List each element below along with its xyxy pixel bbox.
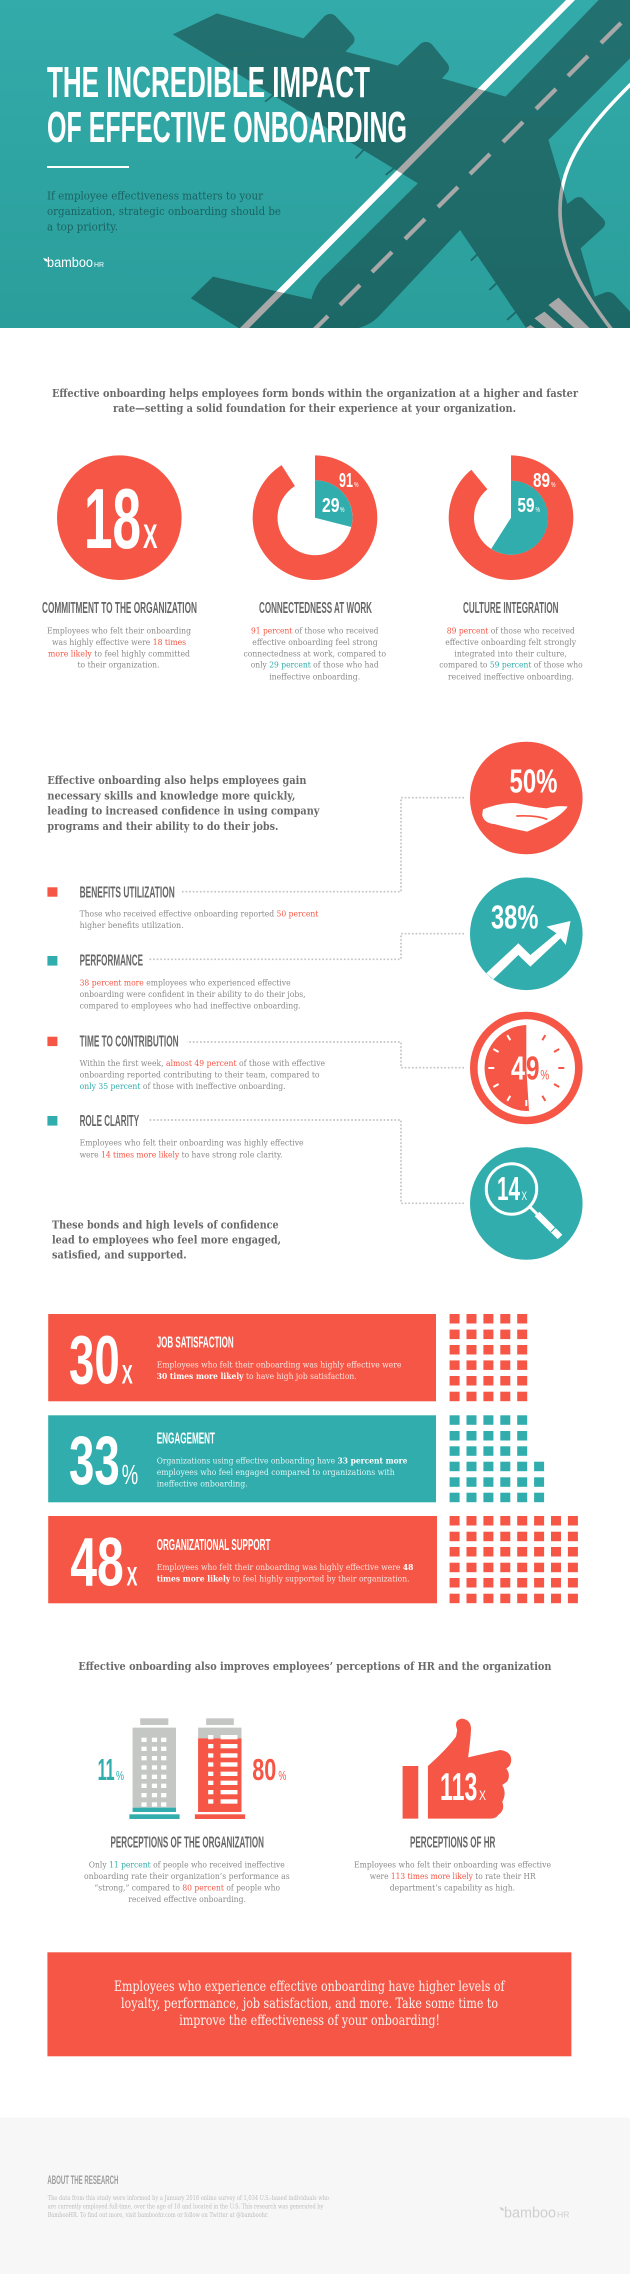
card: engagement: %	[122, 1459, 138, 1490]
subtitle	[47, 190, 281, 234]
chart: culture donut: %	[551, 482, 556, 489]
text block: commitment: COMMITMENT TO THE ORGANIZATION	[42, 600, 197, 617]
icon: 38% growth arrow	[470, 878, 583, 990]
list item: time to contribution	[47, 1034, 325, 1092]
card: job satisfaction: 30 times more likely to have high job satisfaction.	[157, 1372, 357, 1382]
chart: culture donut	[449, 455, 573, 580]
text block: culture: 89 percent of those who received	[447, 626, 575, 636]
icon: 50% hand: 50%	[510, 763, 558, 800]
list item: role clarity: ROLE CLARITY	[80, 1113, 139, 1130]
stat: commitment 18x	[57, 455, 182, 580]
chart: connectedness donut: 29	[322, 495, 340, 517]
panel: bonds section	[42, 386, 583, 682]
text block: perceptions of HR	[354, 1834, 551, 1894]
card: engagement: Organizations using effective onboarding have 33 percent more	[157, 1456, 408, 1466]
chart: connectedness donut: 91	[339, 470, 353, 492]
stat: commitment 18x: X	[143, 518, 158, 556]
subtitle: a top priority.	[47, 220, 118, 234]
logo: bambooHR footer: HR	[557, 2209, 570, 2219]
callout: conclusion: Employees who experience effective onboarding have higher levels of	[114, 1979, 506, 1995]
list item: benefits utilization: higher benefits utilization.	[80, 921, 184, 931]
text block: commitment	[42, 600, 197, 671]
text block: culture: compared to 59 percent of those who	[439, 661, 583, 671]
card: job satisfaction: JOB SATISFACTION	[157, 1335, 234, 1352]
logo: bambooHR: HR	[94, 260, 105, 269]
card: organizational support: X	[127, 1562, 137, 1592]
text block: commitment: was highly effective were 18 times	[52, 638, 186, 648]
card: organizational support	[48, 1516, 437, 1603]
icon: grey building 11%	[98, 1718, 180, 1819]
list item: time to contribution: TIME TO CONTRIBUTION	[80, 1034, 179, 1051]
text block: perceptions of the organization: “strong,” compared to 80 percent of people who	[94, 1883, 280, 1894]
chart: connectedness donut: %	[354, 482, 358, 489]
card: job satisfaction: 30	[69, 1321, 120, 1398]
pictogram: job satisfaction squares	[450, 1314, 527, 1401]
text block: research note	[48, 2195, 329, 2219]
icon: 49% clock: %	[540, 1067, 549, 1082]
icon: red building 80%	[195, 1718, 287, 1819]
text block: perceptions of HR: Employees who felt their onboarding was effective	[354, 1860, 551, 1870]
list item: performance	[47, 953, 306, 1011]
icon: 14x magnifier: X	[522, 1189, 527, 1203]
icon: red building 80%: 80	[252, 1752, 276, 1787]
title: THE INCREDIBLE IMPACT	[47, 58, 370, 107]
list item: performance: PERFORMANCE	[80, 953, 143, 970]
card: organizational support: ORGANIZATIONAL SUPPORT	[157, 1537, 271, 1554]
callout: conclusion: improve the effectiveness of your onboarding!	[179, 2013, 440, 2029]
icon: 14x magnifier	[470, 1147, 583, 1260]
subtitle: organization, strategic onboarding should be	[47, 205, 281, 218]
icon: 14x magnifier: 14	[497, 1170, 520, 1207]
text block: culture: received ineffective onboarding.	[448, 672, 574, 682]
text block: connectedness: only 29 percent of those who had	[251, 661, 379, 671]
heading: skills intro	[47, 773, 320, 833]
card: organizational support: 48	[70, 1524, 124, 1601]
text block: culture: effective onboarding felt strongly	[445, 638, 576, 648]
icon: 49% clock: 4	[511, 1049, 525, 1086]
chart: connectedness donut	[253, 455, 377, 580]
card: engagement	[48, 1415, 436, 1502]
panel: skills section	[47, 742, 583, 1262]
callout: conclusion	[47, 1952, 571, 2056]
icon: thumbs up 113x: 113	[440, 1766, 477, 1809]
list item: benefits utilization	[47, 884, 319, 931]
chart: culture donut: 89	[533, 470, 550, 492]
list item: benefits utilization: BENEFITS UTILIZATION	[80, 884, 175, 902]
icon: grey building 11%: %	[116, 1768, 124, 1783]
list item: time to contribution: Within the first week, almost 49 percent of those with effective	[80, 1059, 325, 1069]
text block: culture: integrated into their culture,	[454, 649, 567, 659]
list item: role clarity	[47, 1113, 304, 1160]
chart: connectedness donut: %	[340, 507, 344, 514]
text block: perceptions of the organization: PERCEPTIONS OF THE ORGANIZATION	[110, 1834, 264, 1851]
icon: 49% clock	[470, 1012, 583, 1124]
heading: skills intro: necessary skills and knowledge more quickly,	[47, 788, 295, 802]
chart: culture donut: 59	[518, 495, 534, 517]
text block: connectedness: CONNECTEDNESS AT WORK	[259, 600, 372, 617]
text block: connectedness: effective onboarding feel strong	[252, 638, 378, 648]
text block: commitment: more likely to feel highly committed	[48, 649, 190, 659]
heading: skills intro: programs and their ability to do their jobs.	[47, 819, 278, 833]
text block: connectedness: connectedness at work, compared to	[244, 649, 386, 659]
card: organizational support: times more likely to feel highly supported by their organization.	[157, 1575, 410, 1585]
stat: commitment 18x: 18	[84, 472, 141, 567]
card: engagement: ineffective onboarding.	[157, 1479, 248, 1489]
card: engagement: ENGAGEMENT	[157, 1430, 215, 1447]
text block: perceptions of the organization: received effective onboarding.	[128, 1895, 246, 1905]
icon: thumbs up 113x	[403, 1719, 511, 1819]
text block: commitment: to their organization.	[78, 661, 160, 671]
list item: benefits utilization: Those who received effective onboarding reported 50 percent	[80, 910, 319, 920]
callout: conclusion: loyalty, performance, job satisfaction, and more. Take some time to	[121, 1996, 498, 2012]
card: engagement: employees who feel engaged compared to organizations with	[157, 1468, 395, 1478]
heading: bonds and confidence	[52, 1217, 281, 1262]
panel: outcomes bars	[48, 1314, 578, 1603]
text block: research note: The data from this study were informed by a January 2018 online survey of 1,034 U.S.-based individuals who	[48, 2195, 329, 2202]
text block: connectedness: 91 percent of those who received	[251, 626, 379, 636]
icon: grey building 11%: 11	[98, 1752, 115, 1787]
list item: role clarity: were 14 times more likely to have strong role clarity.	[80, 1150, 283, 1160]
icon: 49% clock: 9	[526, 1049, 540, 1086]
heading: bonds and confidence: lead to employees who feel more engaged,	[52, 1233, 281, 1247]
list item: performance: 38 percent more employees who experienced effective	[80, 978, 291, 988]
logo: bambooHR: bamboo	[47, 255, 93, 270]
icon: 50% hand	[470, 742, 583, 854]
text block: connectedness	[244, 600, 386, 682]
icon: thumbs up 113x: X	[479, 1787, 486, 1803]
heading: skills intro: leading to increased confidence in using company	[47, 804, 320, 818]
list item: performance: onboarding were confident in their ability to do their jobs,	[80, 990, 306, 1000]
heading: perceptions: Effective onboarding also improves employees’ perceptions of HR and the organization	[78, 1659, 552, 1673]
text block: perceptions of HR: were 113 times more likely to rate their HR	[370, 1872, 536, 1882]
heading: about the research: ABOUT THE RESEARCH	[47, 2173, 118, 2187]
card: job satisfaction	[48, 1314, 436, 1401]
list item: performance: compared to employees who had ineffective onboarding.	[80, 1001, 301, 1011]
card: job satisfaction: X	[122, 1359, 133, 1389]
text block: connectedness: ineffective onboarding.	[269, 672, 360, 682]
subtitle: If employee effectiveness matters to your	[47, 190, 264, 202]
pictogram: organizational support squares	[450, 1516, 578, 1603]
text block: perceptions of the organization: onboarding rate their organization’s performance as	[84, 1872, 290, 1882]
text block: perceptions of the organization: Only 11 percent of people who received ineffective	[89, 1860, 285, 1870]
text block: research note: BambooHR. To find out more, visit bamboohr.com or follow on Twitter at @bamboohr.	[48, 2212, 268, 2219]
text block: perceptions of the organization	[84, 1834, 290, 1905]
card: job satisfaction: Employees who felt their onboarding was highly effective were	[157, 1360, 401, 1370]
icon: 38% growth arrow: 38%	[491, 898, 538, 935]
icon: red building 80%: %	[278, 1768, 287, 1783]
logo: bambooHR footer: bamboo	[504, 2205, 556, 2221]
heading: bonds intro	[52, 386, 579, 415]
text block: culture	[439, 600, 583, 682]
list item: time to contribution: onboarding reported contributing to their team, compared to	[80, 1071, 320, 1081]
text block: perceptions of HR: department’s capability as high.	[390, 1884, 515, 1894]
heading: bonds intro: rate—setting a solid foundation for their experience at your organization.	[113, 401, 516, 415]
list item: time to contribution: only 35 percent of those with ineffective onboarding.	[80, 1082, 286, 1092]
pictogram: engagement squares	[450, 1415, 544, 1502]
heading: bonds and confidence: satisfied, and supported.	[52, 1248, 187, 1262]
panel: hero header	[0, 0, 630, 332]
list item: role clarity: Employees who felt their onboarding was highly effective	[80, 1139, 304, 1149]
title	[47, 58, 407, 152]
text block: commitment: Employees who felt their onboarding	[47, 626, 191, 636]
text block: research note: are currently employed full-time, over the age of 18 and located in the U.S. This research was generated by	[48, 2204, 324, 2210]
chart: culture donut: %	[536, 507, 540, 514]
card: organizational support: Employees who felt their onboarding was highly effective were 48	[157, 1563, 413, 1573]
heading: skills intro: Effective onboarding also helps employees gain	[47, 773, 307, 787]
panel: perceptions section	[78, 1659, 552, 1905]
text block: perceptions of HR: PERCEPTIONS OF HR	[410, 1834, 495, 1851]
card: engagement: 33	[69, 1422, 120, 1499]
heading: bonds and confidence: These bonds and high levels of confidence	[52, 1217, 279, 1231]
panel: about the research footer	[0, 2118, 630, 2274]
illustration: airplane on runway	[0, 0, 630, 332]
